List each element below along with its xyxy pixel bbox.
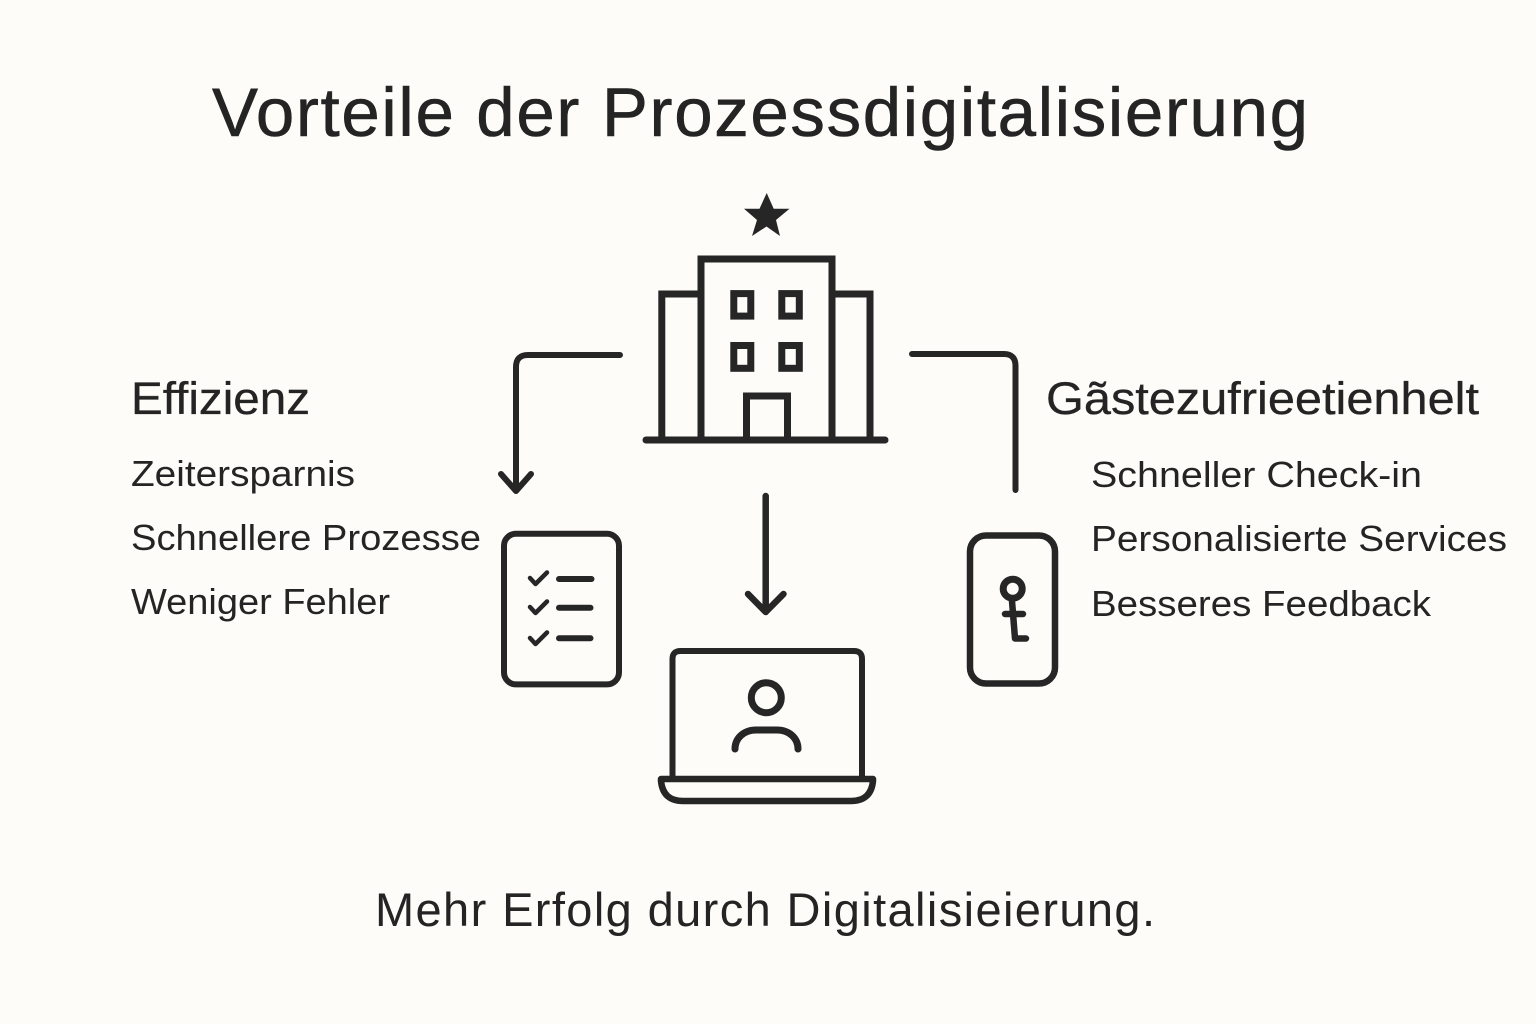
- icon: hotel building with star: [646, 193, 885, 440]
- arrow: building to phone key: [912, 354, 1016, 490]
- list item: Schnellere Prozesse: [131, 517, 481, 558]
- list item: Weniger Fehler: [131, 581, 390, 622]
- heading: Gãstezufrieetienhelt: Gãstezufrieetienhelt: [1046, 373, 1480, 424]
- icon: laptop with user: [661, 651, 873, 801]
- building outline: [646, 259, 885, 440]
- panel: Effizienz: [131, 373, 481, 622]
- list item: Besseres Feedback: [1091, 583, 1432, 624]
- heading: Effizienz: Effizienz: [131, 373, 310, 424]
- arrow: building to laptop: [748, 496, 784, 612]
- panel: Gästezufriedenheit: [1046, 373, 1507, 624]
- closing statement: Mehr Erfolg durch Digitalisieierung.: [375, 883, 1155, 936]
- list item: Zeitersparnis: [131, 453, 355, 494]
- icon: checklist: [504, 534, 619, 684]
- title: Vorteile der Prozessdigitalisierung: [212, 74, 1308, 151]
- icon: phone with key: [970, 536, 1055, 684]
- list item: Personalisierte Services: [1091, 518, 1507, 559]
- icon: star: [744, 193, 790, 236]
- list item: Schneller Check-in: [1091, 454, 1422, 495]
- arrow: building to checklist: [501, 355, 620, 491]
